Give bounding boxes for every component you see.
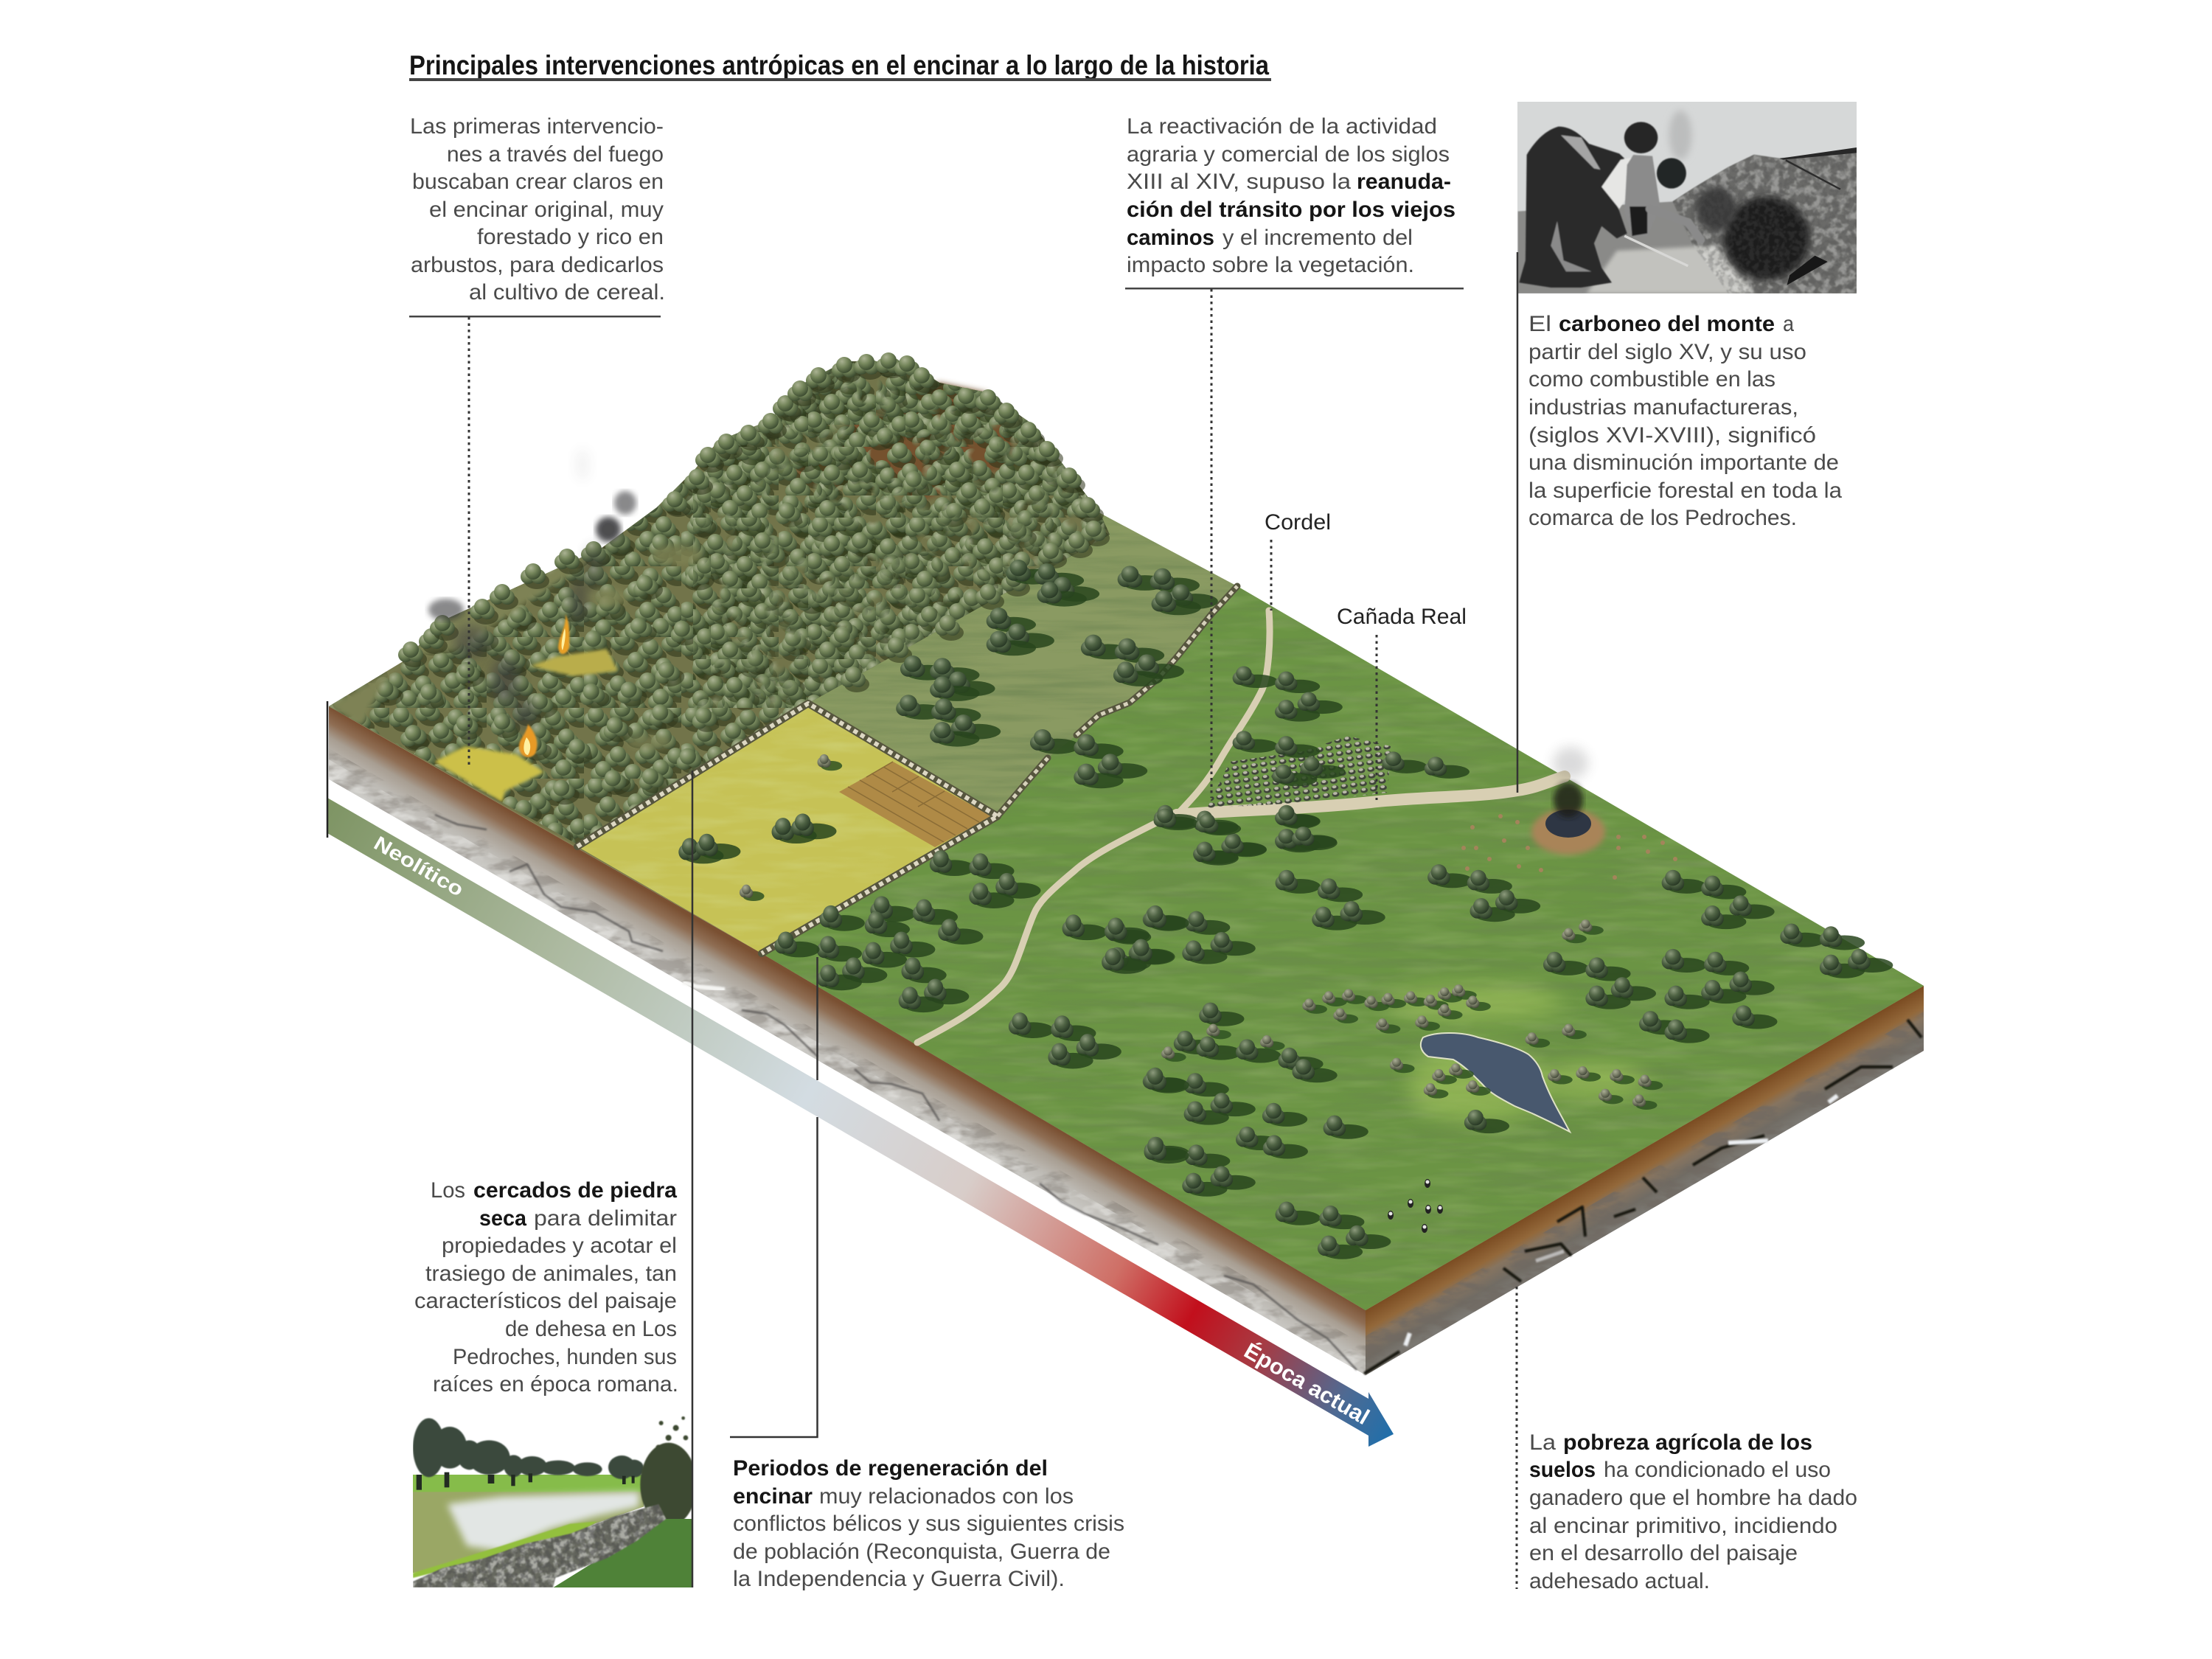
text block: stone walls: característicos del paisaje <box>414 1289 677 1313</box>
forest base ground <box>329 361 1110 846</box>
right soil cross-section <box>1364 986 1924 1375</box>
text block: fire interventions: el encinar original, muy <box>429 198 664 222</box>
text block: charcoal: como combustible en las <box>1528 367 1775 392</box>
dry stone walls <box>577 586 1237 953</box>
smoke from fires <box>428 448 1588 779</box>
label: Cordel <box>1265 510 1331 611</box>
brown ground patches on the hill <box>796 383 1032 501</box>
text block: regeneration periods: muy relacionados con los <box>819 1484 1074 1509</box>
label: Cordel: Cordel <box>1265 510 1331 535</box>
label: Cañada Real: Cañada Real <box>1337 605 1467 629</box>
text block: regeneration periods: conflictos bélicos y sus siguientes crisis <box>733 1512 1124 1536</box>
text block: stone walls: trasiego de animales, tan <box>425 1262 677 1286</box>
holm oaks: east meadow <box>1106 805 1893 1259</box>
text block: poor soils: ganadero que el hombre ha dado <box>1529 1486 1857 1510</box>
text block: charcoal: a <box>1783 312 1794 336</box>
text block: stone walls: propiedades y acotar el <box>442 1234 677 1258</box>
text block: charcoal <box>1528 312 1842 530</box>
holm oaks: yellow field <box>678 754 842 901</box>
text block: charcoal: la superficie forestal en toda la <box>1528 479 1842 503</box>
text block: stone walls: para delimitar <box>534 1206 677 1231</box>
text block: charcoal: El <box>1528 312 1551 336</box>
text block: poor soils <box>1529 1430 1857 1593</box>
holm oaks: pasture field <box>896 560 1218 788</box>
text block: stone walls: Los <box>431 1178 465 1203</box>
text block: fire interventions: nes a través del fuego <box>447 142 664 167</box>
text block: poor soils: ha condicionado el uso <box>1604 1458 1831 1482</box>
pond halo <box>1386 985 1648 1122</box>
text block: charcoal: carboneo del monte <box>1559 312 1775 336</box>
text block: fire interventions: al cultivo de cereal. <box>469 280 665 305</box>
text block: regeneration periods: Periodos de regeneración del <box>733 1456 1048 1481</box>
text block: stone walls: cercados de piedra <box>473 1178 677 1203</box>
text block: regeneration periods <box>733 1456 1124 1591</box>
text block: poor soils: adehesado actual. <box>1529 1569 1710 1593</box>
text block: old roads: reanuda- <box>1357 170 1451 194</box>
text block: old roads: impacto sobre la vegetación. <box>1127 253 1414 277</box>
ploughed brown plot <box>839 762 992 847</box>
rule and dotted leader: roads <box>1125 288 1464 798</box>
rule and dotted leader: fire <box>409 316 661 767</box>
text block: poor soils: La <box>1529 1430 1556 1455</box>
holm oaks: north meadow <box>1153 667 1470 864</box>
cañada real path <box>1177 776 1565 815</box>
yellow cereal field <box>577 703 998 953</box>
text block: poor soils: al encinar primitivo, incidiendo <box>1529 1514 1837 1538</box>
cattle <box>1388 1179 1443 1233</box>
solid leader: stone walls <box>692 771 693 1587</box>
left corner tick line <box>327 701 328 838</box>
photo: flooded dehesa with stone wall <box>413 1416 697 1587</box>
dotted leader: soils <box>1516 1287 1517 1589</box>
photo: charcoal burners <box>1517 102 1857 293</box>
holm oaks: central meadow <box>774 850 1189 1164</box>
text block: charcoal: comarca de los Pedroches. <box>1528 506 1797 530</box>
fire clearing: upper yellow patch <box>530 649 618 676</box>
text block: old roads: ción del tránsito por los viejos <box>1127 198 1455 222</box>
cordel path <box>917 611 1565 1043</box>
text block: fire interventions: arbustos, para dedicarlos <box>411 253 664 277</box>
landscape block top surface <box>329 361 1924 1310</box>
text block: old roads: La reactivación de la actividad <box>1127 114 1437 139</box>
text block: charcoal: partir del siglo XV, y su uso <box>1528 340 1806 364</box>
text block: stone walls <box>414 1178 678 1397</box>
bare ground patches in the forest <box>329 545 702 750</box>
oak forest on the hill <box>329 361 1110 844</box>
timeline end label: Época actual <box>1240 1338 1374 1430</box>
text block: fire interventions: buscaban crear claros en <box>412 170 664 194</box>
text block: poor soils: pobreza agrícola de los <box>1563 1430 1812 1455</box>
hay stacks <box>1461 814 1677 880</box>
fire flames <box>519 614 569 757</box>
olive pasture field <box>808 513 1237 816</box>
timeline gradient arrow <box>327 798 1394 1447</box>
text block: fire interventions <box>410 114 665 305</box>
text block: old roads: XIII al XIV, supuso la <box>1127 170 1351 194</box>
text block: fire interventions: forestado y rico en <box>477 225 664 249</box>
green dehesa meadow <box>762 586 1924 1310</box>
text block: charcoal: industrias manufactureras, <box>1528 395 1798 420</box>
text block: old roads: y el incremento del <box>1222 226 1413 250</box>
text block: old roads: agraria y comercial de los siglos <box>1127 142 1450 167</box>
text block: regeneration periods: de población (Reconquista, Guerra de <box>733 1540 1110 1564</box>
text block: old roads: caminos <box>1127 226 1214 250</box>
text block: stone walls: de dehesa en Los <box>505 1317 677 1341</box>
fire clearing: lower yellow patch <box>434 746 544 802</box>
pond <box>1421 1033 1570 1132</box>
text block: regeneration periods: encinar <box>733 1484 813 1509</box>
text block: old roads <box>1127 114 1455 277</box>
solid leader behind band: regeneration <box>730 957 817 1437</box>
holm oaks: around the pond <box>1302 984 1663 1133</box>
text block: stone walls: Pedroches, hunden sus <box>453 1345 677 1369</box>
timeline start label: Neolítico <box>370 832 467 901</box>
charcoal pile <box>1531 782 1605 855</box>
solid leader: charcoal <box>1517 252 1518 793</box>
title: Principales intervenciones antrópicas en el encinar a lo largo de la historia <box>409 50 1269 80</box>
forest ridge silhouette trees <box>398 352 1110 692</box>
sheep flock <box>1207 736 1391 808</box>
text block: fire interventions: Las primeras intervencio- <box>410 114 664 139</box>
text block: poor soils: en el desarrollo del paisaje <box>1529 1541 1798 1565</box>
text block: charcoal: (siglos XVI-XVIII), significó <box>1528 423 1816 448</box>
text block: stone walls: seca <box>479 1206 526 1231</box>
text block: regeneration periods: la Independencia y Guerra Civil). <box>733 1567 1065 1591</box>
text block: stone walls: raíces en época romana. <box>433 1372 678 1397</box>
text block: poor soils: suelos <box>1529 1458 1596 1482</box>
text block: charcoal: una disminución importante de <box>1528 451 1839 475</box>
left soil cross-section <box>329 706 1366 1375</box>
